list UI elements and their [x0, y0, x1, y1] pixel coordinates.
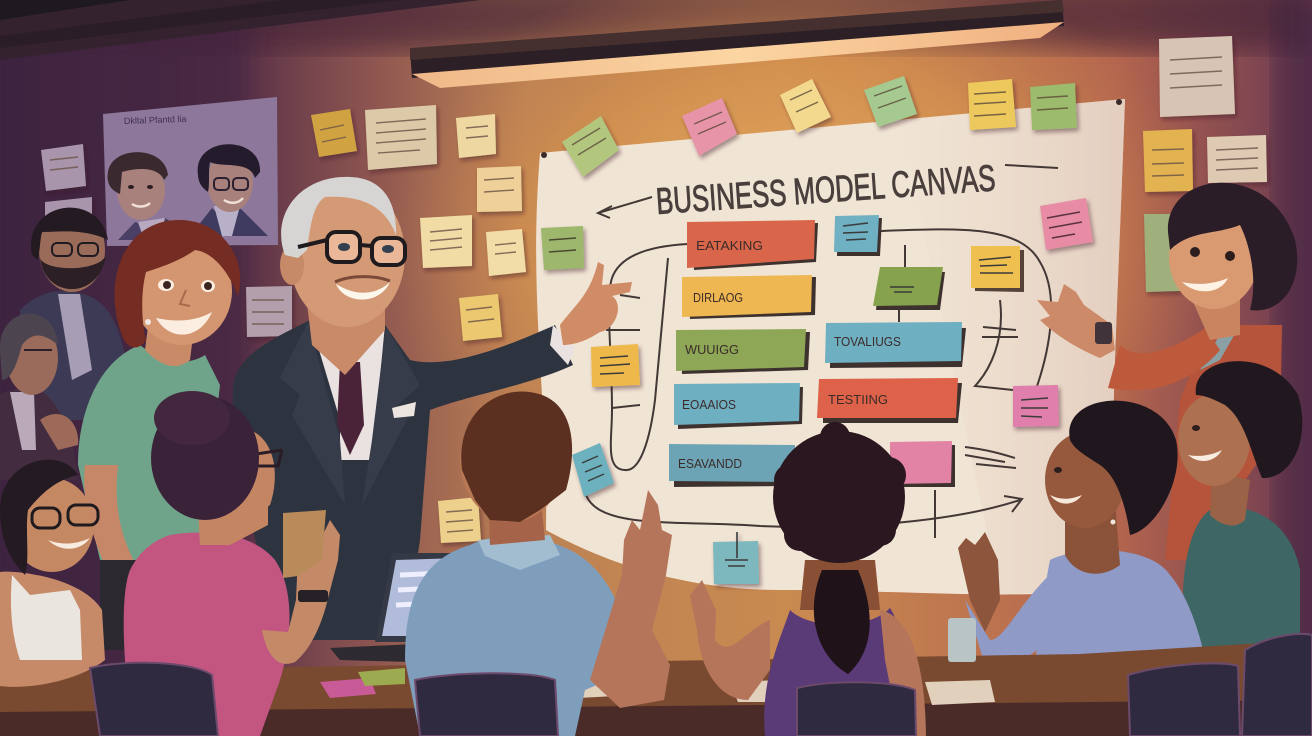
canvas box: tovaliugs: [825, 322, 966, 368]
laptop: [330, 553, 470, 662]
top notes over banner edge: [562, 76, 1077, 177]
canvas box: testing: TESTIING: [828, 392, 888, 407]
canvas box: dirlaog: [682, 275, 816, 319]
woman with bun in pink: [124, 391, 340, 736]
canvas box: eoaaios: [674, 383, 803, 429]
sticky: teal top: [834, 215, 882, 256]
raised arm: [590, 490, 672, 708]
heading: BUSINESS MODEL CANVAS: [655, 157, 997, 222]
wall notes: [41, 36, 1267, 543]
woman from back with curly hair: [690, 422, 926, 736]
canvas box: testing: [817, 378, 962, 423]
poster with two portraits: [103, 97, 278, 246]
presenter in dark suit: [233, 177, 632, 640]
portrait left: [108, 152, 178, 240]
background older man: [0, 314, 78, 480]
canvas box: eataking: EATAKING: [696, 238, 763, 253]
canvas box: pink: [890, 441, 955, 487]
head: [306, 290, 385, 375]
woman with lavender shirt: [958, 401, 1212, 736]
poster with two portraits: Dkltal Pfantd lia: [124, 114, 187, 126]
man from back in blue shirt: [405, 392, 672, 736]
hand pointing: [560, 262, 632, 345]
canvas box: eoaaios: EOAAIOS: [682, 397, 736, 412]
woman upper right in orange: [1037, 183, 1297, 560]
canvas box: wuuigg: [676, 329, 810, 374]
banner: business model canvas: [536, 99, 1125, 594]
chairs: [90, 634, 1312, 736]
canvas box: dirlaog: DIRLAOG: [693, 290, 743, 305]
sticky: green: [873, 267, 945, 310]
canvas box: wuuigg: WUUIGG: [685, 342, 739, 357]
flow lines: [586, 165, 1058, 538]
table: [0, 618, 1312, 736]
sticky: yellow left: [591, 344, 640, 387]
background man with beard: [20, 208, 128, 420]
sticky: teal bottom: [713, 532, 759, 584]
woman in green shirt: [78, 220, 240, 650]
sticky: pink right: [1013, 385, 1059, 427]
canvas box: eataking: [687, 220, 818, 270]
body: [233, 320, 573, 640]
canvas box: tovaliugs: TOVALIUGS: [834, 334, 901, 349]
forearm and hand: [262, 520, 340, 664]
canvas box: esavandd: [669, 444, 795, 487]
sticky: green on banner edge: [541, 226, 584, 270]
glass: [948, 618, 976, 662]
sticky: teal tilted: [572, 443, 614, 497]
canvas box: esavandd: ESAVANDD: [678, 456, 742, 471]
sticky: pink top right: [1040, 198, 1093, 250]
hanging lamp: [410, 0, 1064, 88]
sticky: yellow: [971, 246, 1024, 292]
seated woman with glasses left: [0, 460, 105, 687]
woman right in teal: [1178, 361, 1302, 736]
note lines: [50, 57, 1258, 532]
portrait right: [190, 144, 268, 236]
ceiling beams: [0, 0, 480, 60]
